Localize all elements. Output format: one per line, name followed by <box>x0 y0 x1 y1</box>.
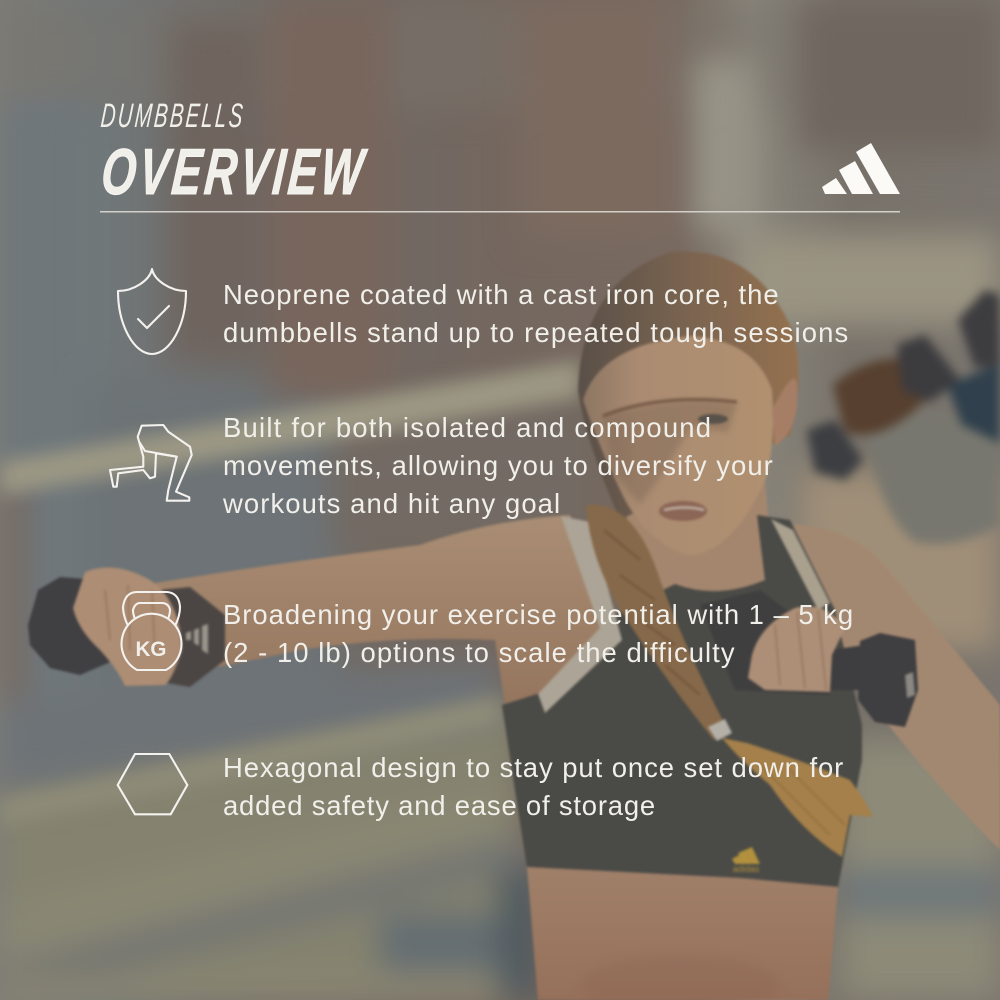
fist dark backing <box>700 590 830 695</box>
left dumbbell <box>28 577 115 675</box>
bra logo <box>732 847 760 874</box>
braid <box>586 505 727 740</box>
text block: versatile movements: workouts and hit any goal <box>222 488 560 519</box>
ear <box>772 379 797 446</box>
hair back <box>578 251 799 520</box>
text block: weight options: (2 - 10 lb) options to scale the difficulty <box>223 637 735 668</box>
icon: kettlebell KG <box>122 592 182 670</box>
icon: lunge figure <box>110 425 192 501</box>
text block: hexagonal design <box>223 752 843 821</box>
brow shadow <box>603 400 737 505</box>
text block: versatile movements: movements, allowing you to diversify your <box>223 450 773 481</box>
mouth <box>659 501 707 521</box>
right fist <box>748 606 845 692</box>
brand logo <box>822 143 900 194</box>
icon: hexagon <box>118 754 187 814</box>
title: OVERVIEW <box>99 136 370 208</box>
right dumbbell <box>830 645 870 690</box>
eye <box>698 414 728 424</box>
text block: weight options: Broadening your exercise potential with 1 – 5 kg <box>223 599 853 630</box>
eyebrow <box>603 399 737 416</box>
text block: durable construction <box>223 279 848 348</box>
torso <box>527 867 838 1000</box>
text block: durable construction: dumbbells stand up to repeated tough sessions <box>223 317 848 348</box>
text block: hexagonal design: Hexagonal design to stay put once set down for <box>223 752 843 783</box>
right shoulder and arm <box>770 524 1000 850</box>
bra logo: adidas <box>733 864 760 874</box>
text block: weight options <box>223 599 853 668</box>
braid tail <box>722 738 873 857</box>
sports bra <box>502 515 862 887</box>
text block: versatile movements <box>222 412 773 519</box>
text block: durable construction: Neoprene coated with a cast iron core, the <box>223 279 779 310</box>
neck <box>625 480 775 620</box>
icon: kettlebell KG: KG <box>136 638 166 661</box>
background rail <box>0 360 580 495</box>
header divider <box>100 211 900 212</box>
background person with dumbbells <box>807 290 1000 544</box>
icon: shield with check <box>118 269 186 354</box>
bra straps <box>538 516 622 713</box>
face <box>583 336 773 556</box>
main athlete photo <box>28 251 1000 1000</box>
text block: versatile movements: Built for both isolated and compound <box>223 412 711 443</box>
subtitle: DUMBBELLS <box>99 97 244 134</box>
braid tie <box>708 719 732 741</box>
left hand <box>73 568 182 686</box>
left arm and shoulder <box>125 515 625 715</box>
text block: hexagonal design: added safety and ease of storage <box>223 790 655 821</box>
